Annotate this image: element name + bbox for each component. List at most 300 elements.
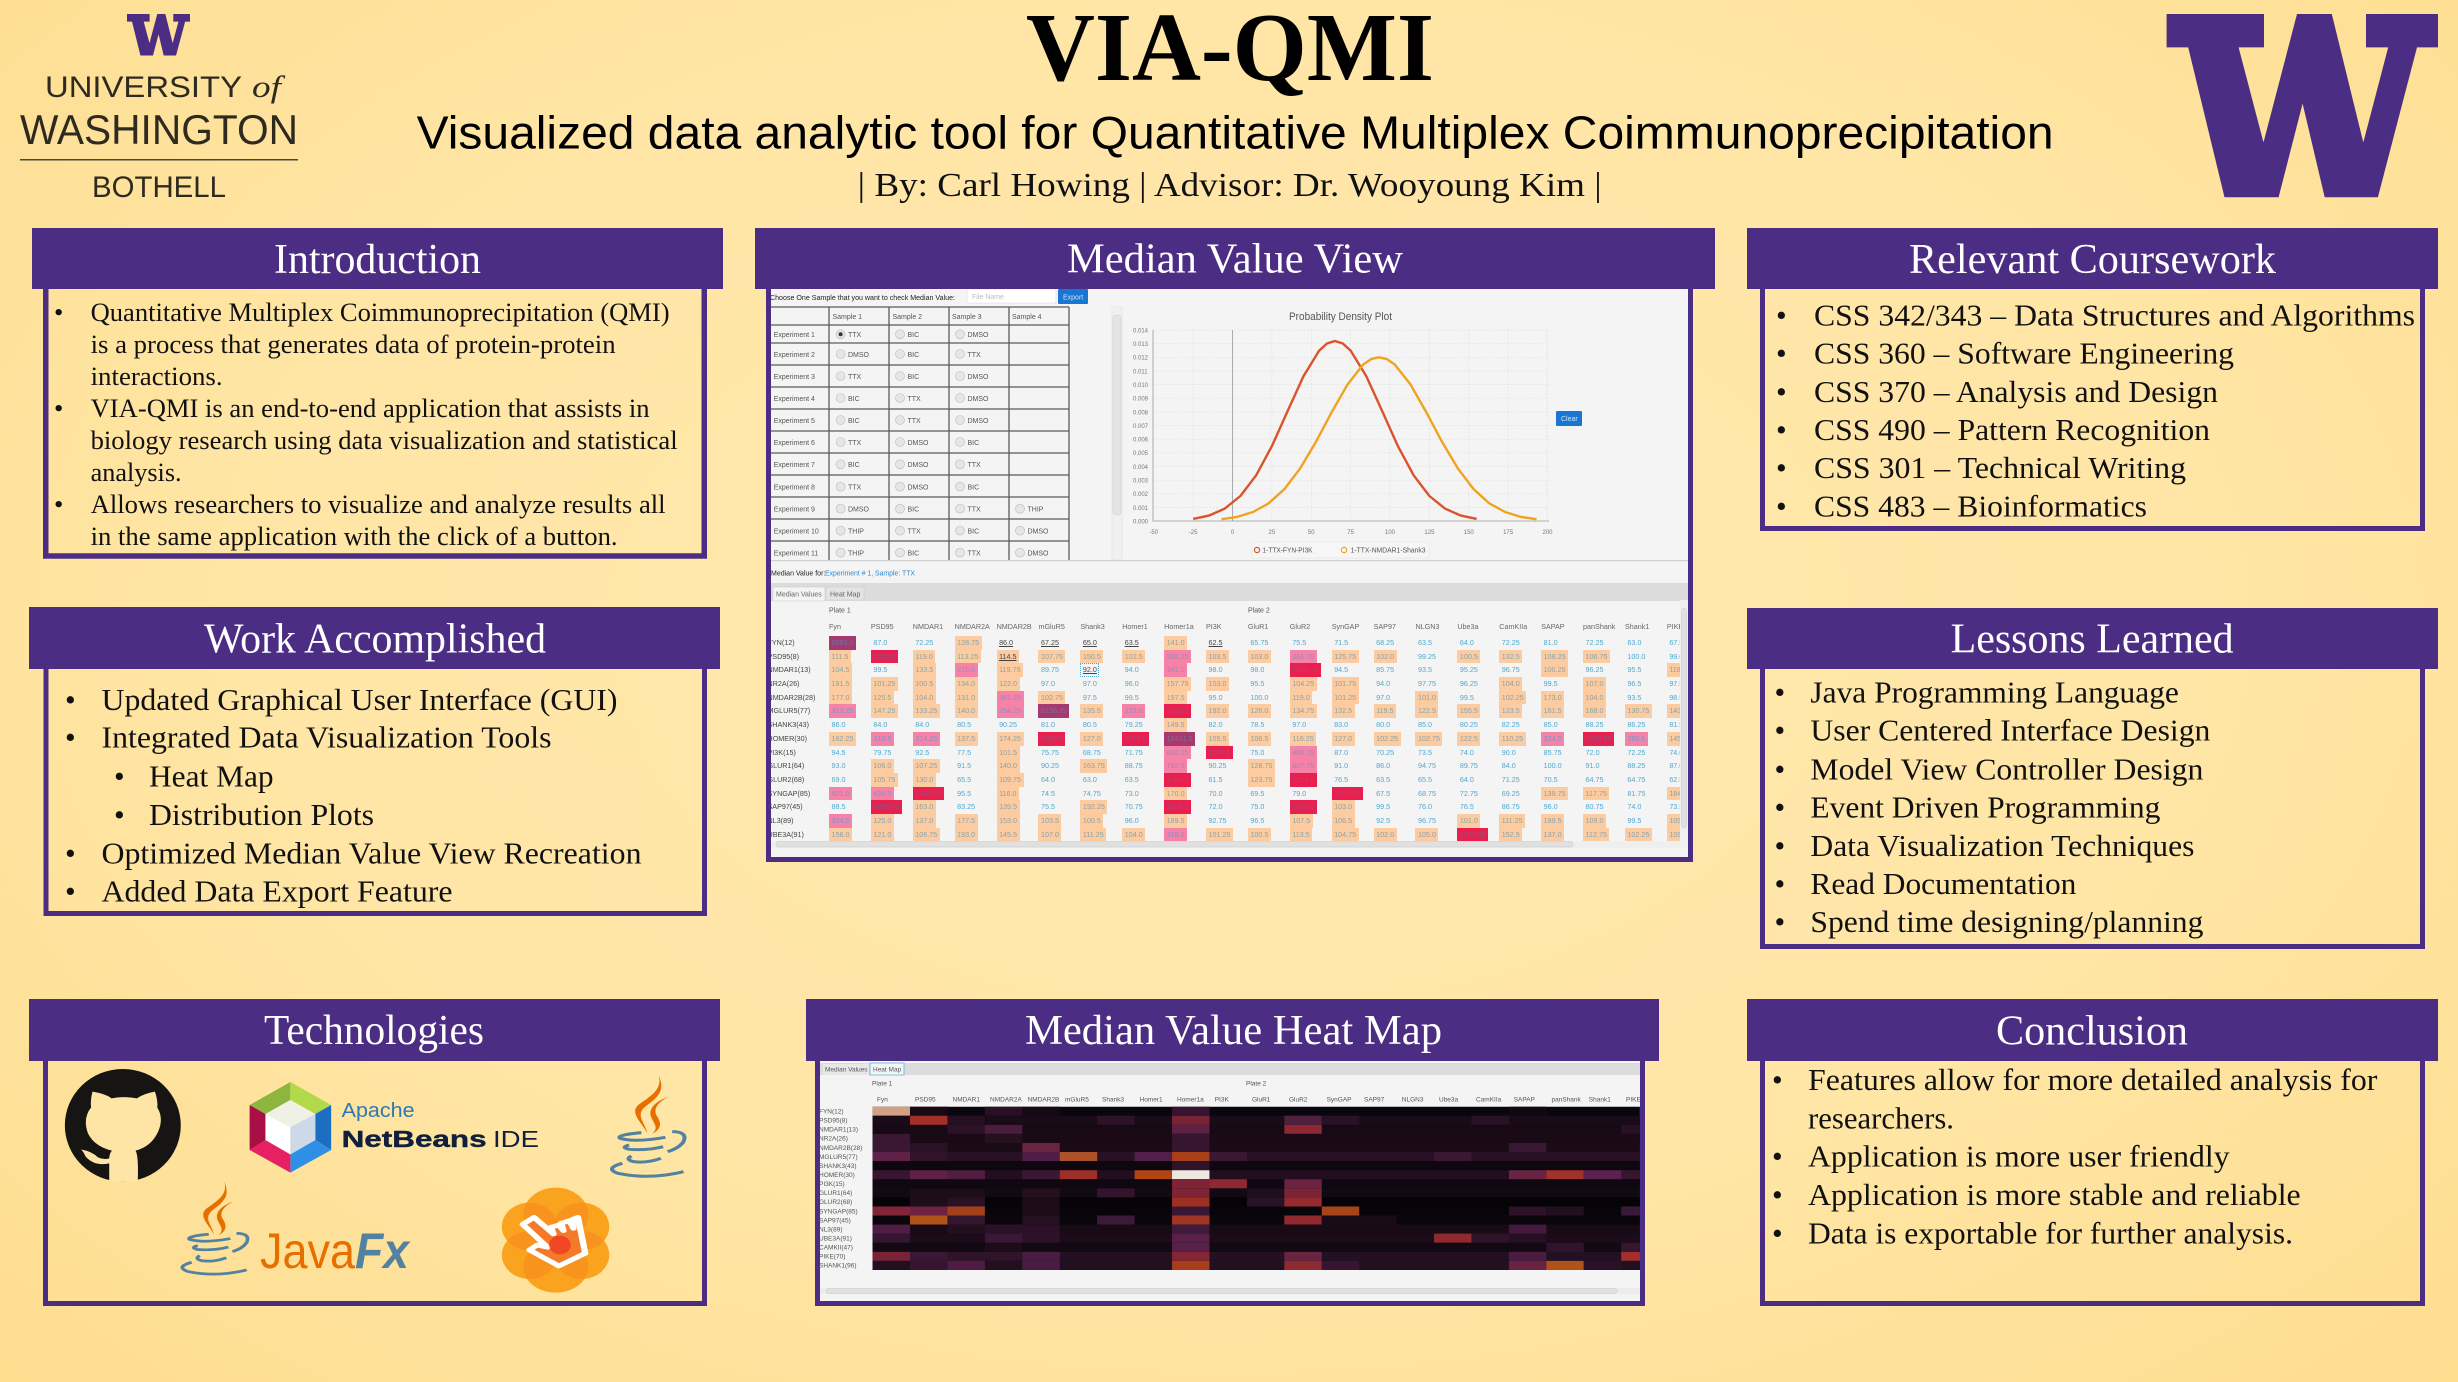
median value table: GluR2 (1290, 622, 1310, 631)
median value table: mGluR5 (1038, 622, 1065, 631)
heat map labels: GluR1 (1252, 1096, 1271, 1104)
median value table: 68.25 (1376, 638, 1394, 647)
median value table: 103.0 (1250, 652, 1268, 661)
chart: probability density plot: Probability Density Plot (1289, 311, 1392, 323)
median value table: 103.5 (1209, 652, 1227, 661)
panel: work accomplished: • (114, 760, 125, 794)
median value table: 101.0 (1418, 693, 1436, 702)
heat map labels: Fyn (877, 1096, 888, 1104)
heat map labels: NMDAR1 (952, 1096, 980, 1104)
median value table: Fyn (829, 622, 841, 631)
median value table: 177.5 (957, 816, 975, 825)
median value table: 99.5 (873, 665, 887, 674)
logo: University of Washington Bothell: BOTHELL (92, 171, 226, 204)
median value table: 64.75 (1586, 775, 1604, 784)
experiment table: Experiment 7 (774, 462, 815, 469)
median value table: 75.5 (1292, 638, 1306, 647)
chart: probability density plot: 50 (1308, 530, 1315, 536)
median value table: 71.75 (1125, 748, 1143, 756)
median value table: 107.0 (1041, 830, 1059, 839)
experiment table: DMSO (1028, 528, 1049, 536)
median value table: 67.25 (1041, 638, 1059, 647)
panel: lessons learned (1747, 608, 2438, 946)
median value table: panShank (1583, 622, 1615, 631)
median value table: 80.75 (1586, 802, 1604, 811)
median value table: 122.0 (999, 679, 1017, 688)
median value table: 163.0 (915, 802, 933, 811)
experiment table: DMSO (908, 462, 929, 469)
experiment table: TTX (848, 440, 862, 447)
median value table: 139.75 (1544, 789, 1566, 798)
label: netbeans: NetBeans (342, 1126, 487, 1152)
panel: work accomplished: Updated Graphical User Interface (GUI) (102, 683, 618, 717)
median value table: 111.25 (1502, 816, 1523, 825)
median value table: 86.0 (832, 720, 846, 729)
median value table: 181.5 (832, 679, 850, 688)
experiment table: Experiment 4 (774, 396, 815, 403)
panel: introduction: biology research using data visualization and statistical (91, 425, 678, 455)
median value table: 92.0 (1083, 665, 1097, 674)
heat map tabs (820, 1063, 1640, 1075)
median value table: 107.75 (1041, 652, 1063, 661)
median value table: NMDAR1 (913, 622, 943, 631)
panel: introduction: Allows researchers to visualize and analyze results all (91, 489, 666, 519)
chart: probability density plot: 0.014 (1133, 328, 1149, 334)
median value table: NMDAR2A (955, 622, 990, 631)
panel: lessons learned: Read Documentation (1810, 867, 2076, 901)
median value table: 107.25 (915, 761, 937, 770)
experiment table: TTX (908, 396, 921, 403)
median value table: 102.0 (1376, 652, 1394, 661)
median value table: PI3K (1206, 622, 1222, 631)
chart: probability density plot: 200 (1542, 530, 1553, 536)
median value table: 313.25 (832, 706, 853, 715)
median value table: 139.5 (999, 802, 1017, 811)
median value table: 1760.5 (1167, 775, 1189, 784)
heat map labels: NMDAR2B (1028, 1096, 1059, 1104)
icon: orange touch flower (502, 1188, 609, 1293)
median value caption: Experiment # 1, Sample: TTX (825, 570, 915, 578)
median value table: 84.0 (1502, 761, 1516, 770)
heat map labels (819, 1080, 1641, 1270)
median value table: 73.5 (1418, 748, 1432, 756)
panel: lessons learned: Lessons Learned (1951, 616, 2234, 663)
median value table: 100.0 (1627, 652, 1645, 661)
median value table: Shank1 (1625, 622, 1649, 631)
median value table: 406.75 (1292, 748, 1314, 756)
label: netbeans: Apache (342, 1100, 415, 1122)
label: netbeans: IDE (493, 1126, 539, 1152)
median value table: 102.25 (1502, 693, 1524, 702)
heat map labels: mGluR5 (1065, 1096, 1089, 1104)
panel: work accomplished (29, 607, 720, 914)
experiment table: TTX (968, 352, 981, 359)
median value table: SynGAP (1332, 622, 1359, 631)
median value table: 122.5 (1418, 706, 1436, 715)
experiment table: BIC (968, 528, 979, 536)
panel: lessons learned: • (1774, 905, 1785, 939)
chart: probability density plot: 0.007 (1133, 424, 1149, 430)
icon: netbeans (250, 1082, 331, 1173)
median value table: 80.5 (957, 720, 971, 729)
icon: github (65, 1069, 181, 1182)
median value table: 1272.25 (1460, 830, 1486, 839)
median value table: 126.0 (1250, 706, 1268, 715)
median value table: 149.5 (1167, 720, 1185, 729)
median value table: 1380.0 (1041, 734, 1063, 743)
median value table: 133.5 (915, 665, 933, 674)
median value table: 310.5 (873, 734, 891, 743)
experiment table: Sample 4 (1012, 314, 1042, 321)
median value table: 156.0 (832, 830, 850, 839)
median value table: 104.25 (1292, 679, 1314, 688)
experiment table: THIP (1028, 506, 1044, 514)
median value table: 96.5 (1250, 816, 1264, 825)
experiment table: BIC (908, 352, 919, 359)
median value table: 86.0 (1376, 761, 1390, 770)
chart: probability density plot: 0 (1231, 530, 1235, 536)
median value table: 88.75 (1125, 761, 1143, 770)
median value table: 79.0 (1292, 789, 1306, 798)
heat map tabs: Heat Map (873, 1066, 902, 1074)
median value table: 75.5 (1041, 802, 1055, 811)
panel: introduction: • (54, 297, 63, 327)
median value table: 135.5 (1083, 706, 1101, 715)
panel: relevant coursework: Relevant Coursework (1909, 236, 2277, 283)
median value table: NMDAR2B (997, 622, 1032, 631)
median value table: 74.0 (1627, 802, 1641, 811)
median value table: 96.0 (1125, 816, 1139, 825)
median value table: 106.0 (873, 761, 891, 770)
median value table: 102.0 (1376, 830, 1394, 839)
median value table: 127.0 (1083, 734, 1101, 743)
median value table: 96.0 (1125, 679, 1139, 688)
experiment table: Experiment 2 (774, 352, 815, 359)
median value table: 99.5 (1125, 693, 1139, 702)
median value table: 161.5 (1544, 706, 1562, 715)
median value table: 99.25 (1418, 652, 1436, 661)
heat map labels: HOMER(30) (819, 1172, 855, 1179)
heat map labels: GLUR1(64) (819, 1190, 852, 1197)
median value table: 78.5 (1250, 720, 1264, 729)
median value table: 121.0 (873, 830, 891, 839)
table plate labels (829, 608, 1270, 614)
median value table: 662.25 (1167, 748, 1189, 756)
median value table: 97.0 (1041, 679, 1055, 688)
median value table: 103.0 (1334, 802, 1352, 811)
median value table: 65.5 (957, 775, 971, 784)
median value table: 97.0 (1083, 679, 1097, 688)
median value table: 64.75 (1627, 775, 1645, 784)
heat map labels: NMDAR2B(28) (819, 1145, 862, 1152)
median value table: 112.75 (1586, 830, 1607, 839)
chart: probability density plot: -50 (1149, 530, 1159, 536)
median value table: 97.75 (1418, 679, 1436, 688)
median value table: 4856.75 (873, 802, 899, 811)
median value table: 92.5 (1376, 816, 1390, 825)
experiment table: TTX (848, 374, 862, 381)
experiment table: BIC (908, 506, 919, 514)
median value table: 95.5 (1250, 679, 1264, 688)
heat map labels: Plate 2 (1246, 1080, 1267, 1088)
experiment table (771, 307, 1122, 560)
median value table: 105.5 (1209, 734, 1227, 743)
median value table: 119.5 (1376, 706, 1394, 715)
heat map labels: panShank (1552, 1096, 1582, 1104)
median value table: 104.0 (1502, 679, 1520, 688)
chart: probability density plot: 75 (1347, 530, 1355, 536)
experiment table: BIC (908, 332, 919, 339)
chart: probability density plot: 125 (1424, 530, 1435, 536)
chart: probability density plot: 0.005 (1133, 451, 1149, 457)
median value table: 100.0 (1250, 693, 1268, 702)
experiment table: BIC (908, 374, 919, 381)
median value table: 137.0 (915, 816, 933, 825)
median value table: 103.5 (1041, 816, 1059, 825)
heat map labels: PI3K(15) (819, 1181, 845, 1188)
heat map labels: SAP97 (1364, 1096, 1385, 1104)
median value table: 4152.0 (1125, 734, 1147, 743)
panel: work accomplished: Work Accomplished (204, 616, 546, 663)
median value table: 122.5 (1460, 734, 1478, 743)
panel: relevant coursework: • (1776, 413, 1787, 447)
heat map labels: CamKIIa (1476, 1096, 1502, 1104)
median value table: 162.25 (832, 734, 853, 743)
median value table: 95.5 (1627, 665, 1641, 674)
median value table: 95.25 (1460, 665, 1478, 674)
table plate labels: Plate 2 (1248, 608, 1270, 614)
median value table: 97.0 (1376, 693, 1390, 702)
median value table: 76.5 (1460, 802, 1474, 811)
experiment table: DMSO (848, 352, 870, 359)
experiment table: TTX (968, 550, 981, 558)
experiment table: Experiment 10 (774, 528, 819, 536)
median value table: 94.0 (1376, 679, 1390, 688)
median value table: 74.5 (1041, 789, 1055, 798)
median value table: 76.0 (1418, 802, 1432, 811)
median value table: 1063.0 (1209, 748, 1230, 756)
panel: introduction: in the same application with the click of a button. (91, 521, 618, 551)
heat map labels: NR2A(26) (819, 1136, 848, 1143)
experiment table: Experiment 5 (774, 418, 815, 425)
panel: conclusion: • (1772, 1140, 1783, 1174)
median value table: 123.5 (1502, 706, 1520, 715)
median value table: 65.75 (1250, 638, 1268, 647)
median value table: Homer1 (1122, 622, 1148, 631)
panel: conclusion: Features allow for more detailed analysis for (1808, 1063, 2377, 1097)
median value table: 85.75 (1544, 748, 1562, 756)
median value table: 86.0 (999, 638, 1013, 647)
median value table: 119.0 (915, 652, 933, 661)
heat map scrollbar (820, 1288, 1640, 1294)
experiment table: TTX (848, 332, 862, 339)
median value caption (771, 570, 915, 578)
median value table: 91.0 (1586, 761, 1600, 770)
authors: | By: Carl Howing | Advisor: Dr. Wooyoung Kim | (858, 167, 1602, 204)
button: clear: Clear (1561, 416, 1578, 423)
median value table: 127.0 (1334, 734, 1352, 743)
median value table: 94.0 (1125, 665, 1139, 674)
median value table: 109.0 (1586, 816, 1604, 825)
panel: work accomplished: Optimized Median Value View Recreation (102, 836, 642, 870)
median value table: 107.5 (1292, 816, 1310, 825)
chart: probability density plot: 0.011 (1133, 369, 1148, 375)
panel: relevant coursework: • (1776, 337, 1787, 371)
panel: work accomplished: Distribution Plots (149, 798, 374, 832)
panel: lessons learned: User Centered Interface Design (1810, 714, 2210, 748)
experiment table: THIP (848, 528, 864, 536)
median value table: 106.75 (1586, 652, 1608, 661)
heat map labels: Shank1 (1589, 1096, 1611, 1104)
legend: 1-TTX-NMDAR1-Shank3 (1351, 548, 1426, 554)
heat map labels: PSD95 (915, 1096, 936, 1104)
table scrollbars (771, 600, 1688, 848)
median value table: 75.0 (1250, 802, 1264, 811)
panel: introduction: Quantitative Multiplex Coimmunoprecipitation (QMI) (91, 297, 670, 327)
experiment table: Sample 2 (892, 314, 922, 321)
experiment table: DMSO (1028, 550, 1049, 558)
median value table: 69.25 (1502, 789, 1520, 798)
panel: introduction (32, 228, 723, 556)
subtitle: Visualized data analytic tool for Quantitative Multiplex Coimmunoprecipitation (417, 106, 2054, 158)
median value table: 85.0 (1418, 720, 1432, 729)
median value table: PSD95 (871, 622, 894, 631)
logo: University of Washington Bothell (20, 14, 298, 204)
panel: median value heat map (806, 999, 1659, 1304)
panel: introduction: • (54, 393, 63, 423)
median value table: 103.0 (1209, 679, 1227, 688)
median value table: 93.5 (1627, 693, 1641, 702)
chart: probability density plot: 0.000 (1133, 520, 1149, 526)
median value table: 163.75 (1083, 761, 1105, 770)
median value table: 96.25 (1460, 679, 1478, 688)
toolbar: Choose One Sample that you want to check Median Value: (770, 295, 955, 302)
median value table: 100.5 (915, 679, 933, 688)
chart: probability density plot: 25 (1269, 530, 1276, 536)
median value table: 97.5 (1083, 693, 1097, 702)
median value table: 71.5 (1334, 638, 1348, 647)
median value table: 63.0 (1083, 775, 1097, 784)
median value table: GluR1 (1248, 622, 1268, 631)
median value table: 81.0 (1041, 720, 1055, 729)
icon: javafx (182, 1182, 411, 1279)
logo: University of Washington Bothell: of (252, 69, 286, 104)
median value table: 89.75 (1041, 665, 1059, 674)
median value table: 105.0 (1418, 830, 1436, 839)
median value table: 89.75 (1460, 761, 1478, 770)
panel: conclusion (1747, 999, 2438, 1304)
median value table: 116.25 (1292, 734, 1314, 743)
median value table: 64.0 (1460, 638, 1474, 647)
logo: large W (2167, 14, 2438, 197)
median value table: 84.0 (873, 720, 887, 729)
experiment table: BIC (848, 396, 860, 403)
median value table: 104.0 (1125, 830, 1143, 839)
median value table: 79.75 (873, 748, 891, 756)
panel: technologies: Technologies (264, 1007, 484, 1054)
median value table: 125.75 (1334, 652, 1356, 661)
median value table: 119.75 (999, 665, 1021, 674)
median value table: 101.25 (1209, 830, 1230, 839)
median value table: 72.0 (1209, 802, 1223, 811)
median value table: 97.0 (1292, 720, 1306, 729)
median value table: 130.75 (1627, 706, 1649, 715)
median value table (771, 620, 1680, 841)
median value table: 75.0 (1250, 748, 1264, 756)
chart: probability density plot: 0.013 (1133, 342, 1149, 348)
panel: introduction: interactions. (91, 361, 223, 391)
logo: University of Washington Bothell: UNIVERSITY (45, 71, 242, 104)
median value table: 70.75 (1125, 802, 1143, 811)
median value table: 72.25 (1502, 638, 1520, 647)
heat map labels: NMDAR1(13) (819, 1127, 858, 1134)
heat map labels: NLGN3 (1402, 1096, 1424, 1104)
median value table: 108.25 (1544, 652, 1566, 661)
median value table: 100.25 (1544, 665, 1566, 674)
heat map tabs: Median Values (825, 1066, 868, 1074)
median value table: 75.75 (1041, 748, 1059, 756)
panel: relevant coursework: CSS 370 – Analysis and Design (1814, 375, 2218, 409)
panel: median value heat map: Median Value Heat Map (1025, 1007, 1442, 1054)
median value table: 113.5 (1292, 830, 1310, 839)
median value table: 189.5 (1167, 816, 1185, 825)
median value table: 92.75 (1209, 816, 1227, 825)
heat map labels: PIKE(70) (819, 1254, 845, 1261)
median value table: 192.0 (1209, 706, 1227, 715)
chart: probability density plot: 0.008 (1133, 410, 1149, 416)
median value table: 420.5 (873, 789, 891, 798)
median value table: 1330.25 (1586, 734, 1612, 743)
median value table: 102.25 (1627, 830, 1649, 839)
median value table: 70.25 (1376, 748, 1394, 756)
icon: java (612, 1075, 685, 1176)
heat map labels: SAP97(45) (819, 1217, 851, 1224)
median value table: 83.0 (1334, 720, 1348, 729)
median value table: 100.5 (1250, 830, 1268, 839)
median value table: 63.5 (1125, 638, 1139, 647)
icon: javafx: Java (260, 1223, 355, 1279)
median value table: 72.25 (915, 638, 933, 647)
experiment table: DMSO (968, 374, 989, 381)
median value table: 106.5 (1334, 816, 1352, 825)
experiment table: DMSO (848, 506, 870, 514)
experiment table: DMSO (908, 440, 929, 447)
median value table: Homer1a (1164, 622, 1194, 631)
median value table: 192.25 (1083, 802, 1105, 811)
median value table: CamKIIa (1499, 622, 1527, 631)
median value table: 9883.0 (832, 638, 853, 647)
panel: relevant coursework: CSS 483 – Bioinformatics (1814, 490, 2147, 524)
median value table: 95.5 (957, 789, 971, 798)
median value table: 174.25 (999, 734, 1021, 743)
median value table: 64.0 (1041, 775, 1055, 784)
median value table: 94.5 (832, 748, 846, 756)
experiment table: BIC (968, 440, 979, 447)
heat map labels: SAPAP (1514, 1096, 1535, 1104)
median value table: 85.75 (1376, 665, 1394, 674)
chart: probability density plot (1133, 311, 1553, 558)
median value table: 101.25 (873, 679, 895, 688)
panel: lessons learned: Data Visualization Techniques (1810, 829, 2194, 863)
chart: probability density plot: 0.002 (1133, 492, 1149, 498)
median value table: 132.5 (1502, 652, 1520, 661)
legend (1252, 542, 1429, 558)
median value table: 96.25 (1586, 665, 1604, 674)
median value table: 261.75 (1292, 652, 1314, 661)
median value table: 104.0 (915, 693, 933, 702)
median value table: 134.0 (957, 679, 975, 688)
median value table: 70.5 (1544, 775, 1558, 784)
